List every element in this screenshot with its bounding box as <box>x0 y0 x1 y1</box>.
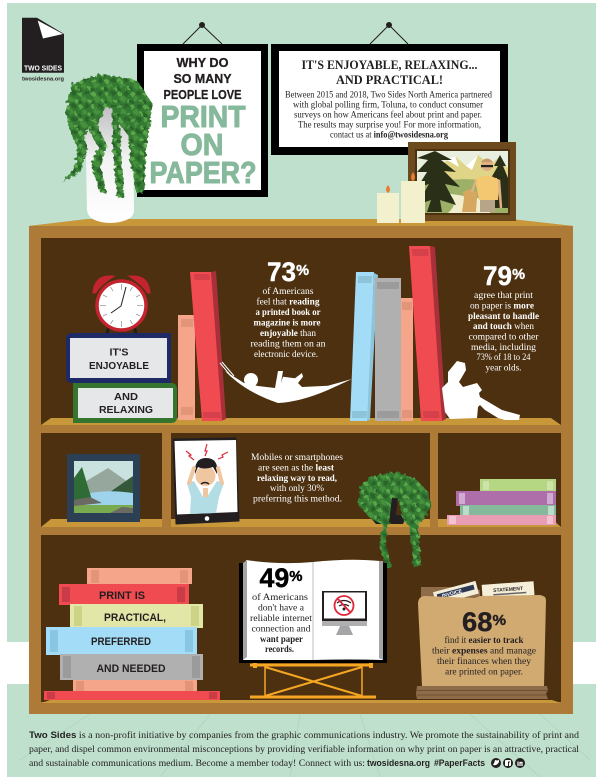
framed intro poster <box>271 22 508 155</box>
poster heading: WHY DO <box>176 55 228 70</box>
footer text: twosidesna.org <box>367 758 430 768</box>
monitor no wifi icon <box>322 591 367 635</box>
logo: TWO SIDES <box>24 64 62 72</box>
print on paper: PAPER? <box>150 155 256 190</box>
poster heading: SO MANY <box>174 71 232 86</box>
footer text: and sustainable communications medium. Become a member today! Connect with us: <box>29 758 365 769</box>
statistic 68% <box>432 607 537 678</box>
poster heading: PEOPLE LOVE <box>164 87 242 102</box>
upright books left <box>178 271 226 421</box>
statistic 73%: enjoyable than <box>260 328 316 339</box>
statistic 49%: of Americans <box>252 592 308 603</box>
print on paper: ON <box>180 127 224 162</box>
seated reader silhouette <box>442 361 520 420</box>
book: and relaxing: RELAXING <box>99 405 153 416</box>
bookcase frame <box>29 219 573 714</box>
print on paper: PRINT <box>160 99 246 134</box>
statistic 73%: of Americans <box>262 286 314 297</box>
statistic 73%: magazine is more <box>254 318 321 328</box>
footer text: #PaperFacts <box>434 758 485 768</box>
small hanging plant <box>358 472 431 569</box>
statistic 79%: 73% of 18 to 24 <box>476 352 531 363</box>
mobile text: Mobiles or smartphones <box>251 452 343 463</box>
statistic 79%: and touch when <box>473 321 534 332</box>
statistic 49%: records. <box>265 644 294 655</box>
man <box>472 158 501 212</box>
intro heading: IT'S ENJOYABLE, RELAXING... <box>302 57 478 72</box>
book: it's enjoyable <box>66 333 171 383</box>
intro text: surveys on how Americans feel about print and paper. <box>294 110 482 120</box>
statistic 68%: % <box>492 612 506 629</box>
open book <box>239 560 387 663</box>
upright books right <box>350 246 446 421</box>
book stand <box>250 655 376 697</box>
framed photo <box>408 142 516 221</box>
statistic 73%: a printed book or <box>256 307 321 318</box>
statistic 79%: agree that print <box>474 290 533 301</box>
candles <box>377 172 425 223</box>
plant and vase <box>62 74 152 223</box>
intro text: with global polling firm, Toluna, to conduct consumer <box>293 100 484 110</box>
statistic 68%: find it easier to track <box>444 635 524 646</box>
statistic 79% <box>468 261 540 374</box>
statistic 79%: on paper is more <box>470 300 535 312</box>
intro heading <box>302 57 478 87</box>
mobile text: preferring this method. <box>253 494 342 504</box>
large book stack: PREFERRED <box>91 636 151 648</box>
intro text: contact us at info@twosidesna.org <box>330 130 448 140</box>
mobile text: relaxing way to read, <box>257 473 337 484</box>
poster heading <box>164 55 242 102</box>
statement slip: STATEMENT <box>493 586 523 594</box>
intro text: The results may surprise you! For more information, <box>298 120 481 130</box>
statistic 73%: 73 <box>267 257 296 287</box>
intro heading: AND PRACTICAL! <box>336 72 443 87</box>
large book stack: PRINT IS <box>99 590 145 602</box>
statistic 68%: are printed on paper. <box>445 666 523 678</box>
hammock reader <box>220 362 352 403</box>
statistic 73%: electronic device. <box>254 349 318 360</box>
statistic 79%: media, including <box>471 342 536 353</box>
large book stack: AND NEEDED <box>96 663 166 675</box>
logo: twosidesna.org <box>22 76 64 82</box>
statistic 73%: reading them on an <box>250 338 326 350</box>
large book stack <box>44 568 220 700</box>
book stack small <box>447 479 556 525</box>
statistic 49%: connection and <box>252 624 311 634</box>
mobile text: are seen as the least <box>258 462 335 474</box>
statistic 79%: pleasant to handle <box>468 311 540 322</box>
folder <box>416 581 548 699</box>
invoice slip: INVOICE <box>441 588 463 599</box>
footer text: paper, and dispel common environmental misconceptions by providing verifiable information on why print on paper is an attractive, practical <box>29 744 579 755</box>
book: it's enjoyable: IT'S <box>110 348 129 358</box>
social icons <box>491 758 525 768</box>
statistic 49%: 49 <box>260 563 289 593</box>
statistic 49%: % <box>289 568 302 585</box>
logo <box>22 18 64 83</box>
book: it's enjoyable: ENJOYABLE <box>89 361 149 372</box>
framed title poster <box>137 22 268 197</box>
intro text <box>285 90 492 140</box>
statistic 79%: compared to other <box>468 332 539 342</box>
statistic 68%: their finances when they <box>437 656 531 667</box>
alarm clock <box>94 277 149 334</box>
footer text: Two Sides is a non-profit initiative by companies from the graphic communications industry. We promote the sustainability of print and <box>29 730 579 741</box>
statistic 49%: don't have a <box>258 602 305 614</box>
statistic 73%: % <box>296 262 309 279</box>
statistic 79%: % <box>512 266 525 283</box>
large book stack: PRACTICAL, <box>104 612 166 624</box>
tablet with stressed man <box>173 438 239 524</box>
framed landscape <box>67 454 140 522</box>
statistic 49%: want paper <box>260 634 304 645</box>
print on paper <box>150 99 256 190</box>
footer text <box>29 730 579 769</box>
statistic 73% <box>250 257 326 360</box>
dog <box>462 189 477 212</box>
statistic 49%: reliable internet <box>250 613 312 624</box>
mobile text <box>251 452 343 504</box>
statistic 79%: 79 <box>483 261 512 291</box>
statistic 68%: their expenses and manage <box>432 646 537 656</box>
book: and relaxing: AND <box>114 392 138 403</box>
statistic 73%: feel that reading <box>256 296 320 308</box>
book: and relaxing <box>73 383 177 423</box>
statistic 79%: year olds. <box>486 362 522 374</box>
statistic 68%: 68 <box>462 607 492 637</box>
intro text: Between 2015 and 2018, Two Sides North America partnered <box>285 90 492 100</box>
statistic 49% <box>250 563 312 655</box>
mobile text: with only 30% <box>270 483 324 494</box>
